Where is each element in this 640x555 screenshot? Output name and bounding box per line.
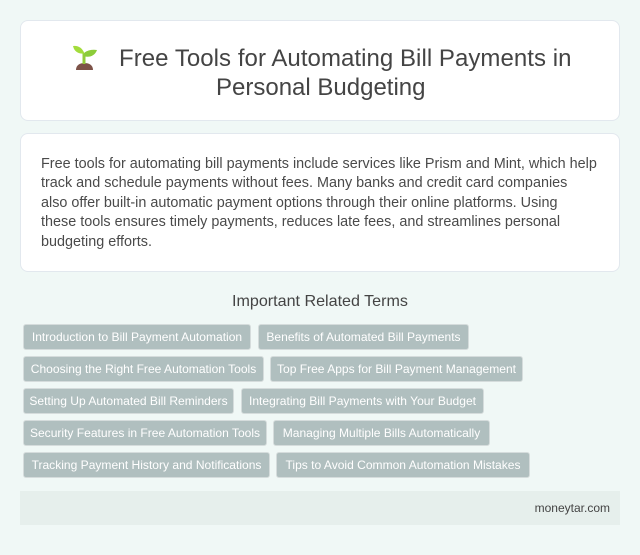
tag: Benefits of Automated Bill Payments [266, 330, 461, 344]
footer bar [20, 491, 620, 525]
heading: related terms: Important Related Terms [232, 292, 408, 310]
tag: Top Free Apps for Bill Payment Management [277, 362, 516, 376]
line 5: budgeting efforts. [41, 234, 152, 250]
tag: Managing Multiple Bills Automatically [283, 426, 480, 440]
tag [241, 388, 484, 414]
tag: Choosing the Right Free Automation Tools [31, 362, 256, 376]
tag [23, 388, 234, 414]
tag [23, 356, 264, 382]
tag: Integrating Bill Payments with Your Budget [249, 394, 476, 408]
line 4: these tools ensures timely payments, reduces late fees, and streamlines personal [41, 214, 560, 230]
title line 2: Personal Budgeting [216, 74, 425, 101]
tag [258, 324, 469, 350]
footer source text: moneytar.com [535, 501, 610, 515]
tag: Introduction to Bill Payment Automation [32, 330, 242, 344]
tag [276, 452, 530, 478]
tag [273, 420, 490, 446]
description text [41, 156, 597, 250]
tag [23, 420, 267, 446]
line 2: track and schedule payments without fees. Many banks and credit card companies [41, 175, 567, 191]
tag: Tips to Avoid Common Automation Mistakes [285, 458, 521, 472]
tag [23, 324, 251, 350]
tag list [23, 324, 530, 478]
line 1: Free tools for automating bill payments include services like Prism and Mint, which help [41, 156, 597, 172]
tag: Setting Up Automated Bill Reminders [29, 394, 228, 408]
tag [270, 356, 523, 382]
line 3: also offer built-in automatic payment options through their online platforms. Using [41, 195, 557, 211]
icon: seedling [73, 46, 97, 70]
panel: description [20, 133, 620, 272]
tag: Tracking Payment History and Notifications [32, 458, 261, 472]
title line 1: Free Tools for Automating Bill Payments in [119, 45, 572, 72]
tag [23, 452, 270, 478]
panel: title card [20, 20, 620, 121]
tag: Security Features in Free Automation Tools [30, 426, 260, 440]
